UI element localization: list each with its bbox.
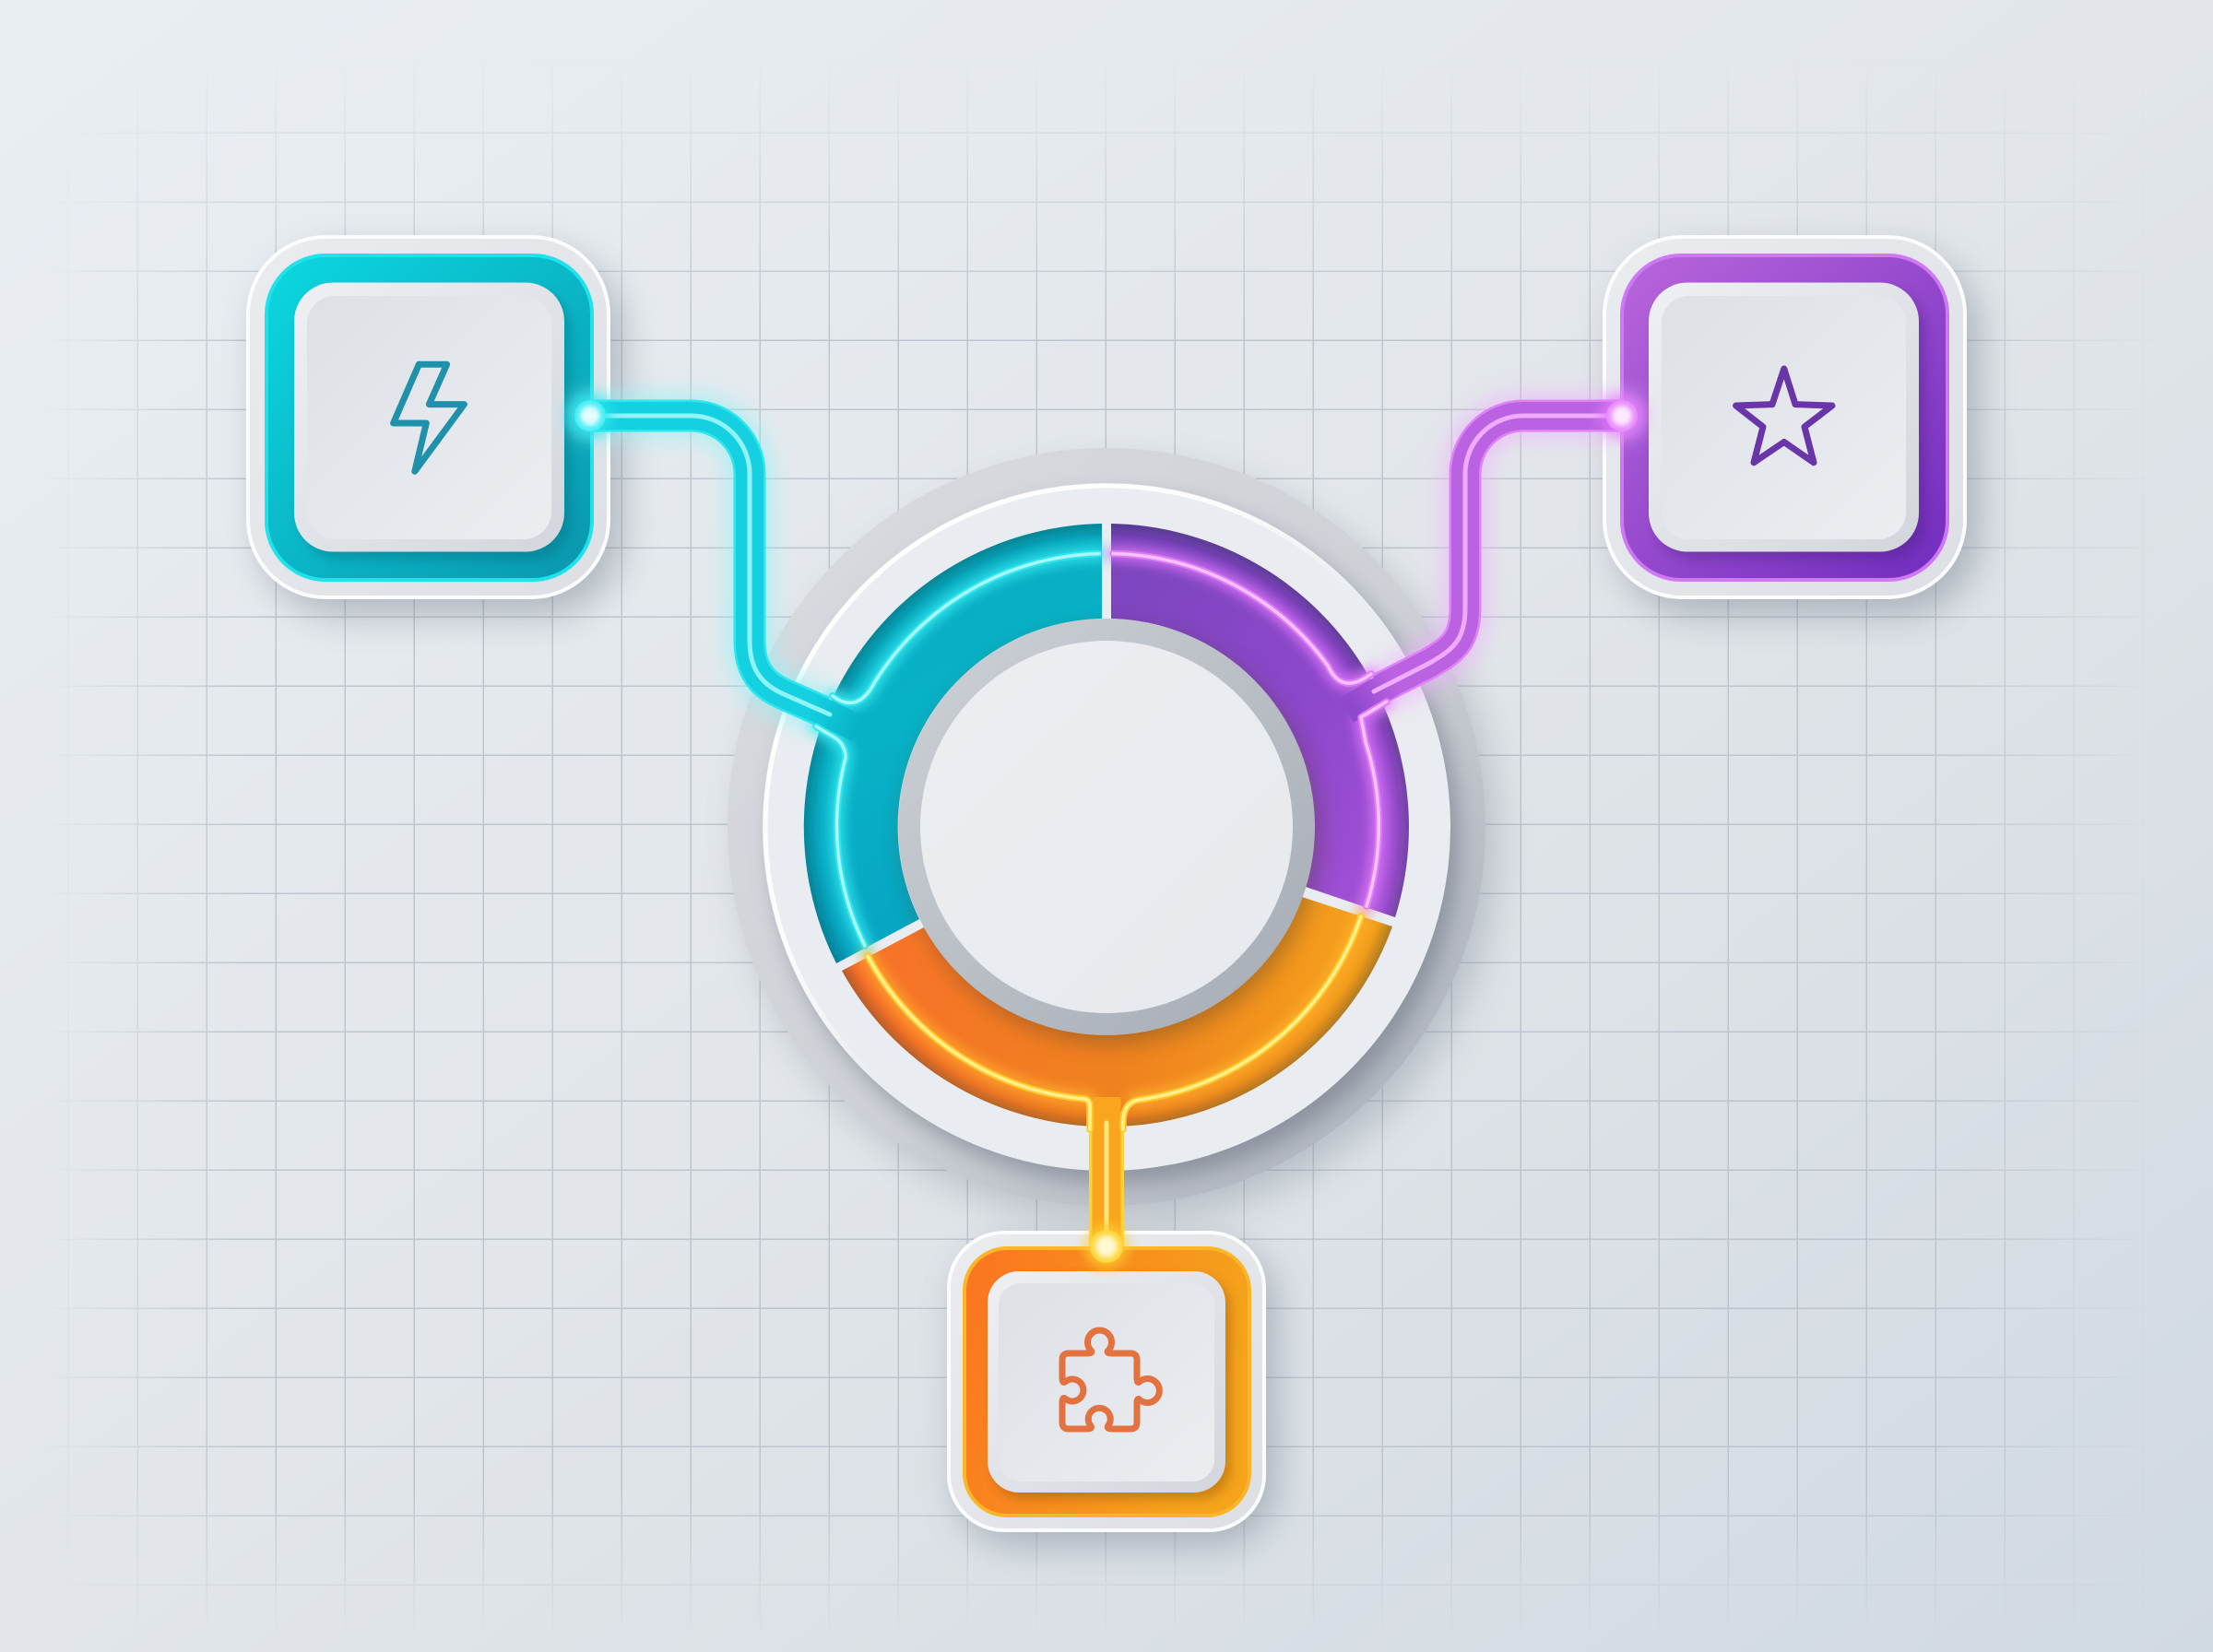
orange frame [964,1248,1249,1516]
connector: teal [568,394,1099,946]
card shell [248,237,609,597]
teal frame [266,255,592,580]
orange trace glow [868,916,1361,1100]
card: star [1604,237,1980,616]
key face [1662,296,1906,539]
purple node [1600,394,1644,438]
inner groove [898,619,1315,1035]
card shell [1604,237,1965,597]
purple ring trace [1113,553,1387,906]
teal glow [590,416,816,709]
purple pipe [1379,416,1622,689]
white ring plate [763,483,1460,1184]
orange node [1084,1224,1129,1268]
key face [307,296,551,539]
teal trace glow [816,553,1099,946]
connector: orange [868,916,1361,1268]
orange ring trace [868,916,1361,1129]
teal ring trace [816,553,1099,946]
orange glow [1083,1143,1130,1246]
teal node [568,394,612,438]
orange pipe [1089,1120,1124,1246]
purple glow [1392,416,1622,684]
card shell [949,1233,1264,1530]
card shadow [957,1245,1276,1546]
connector: purple [1113,394,1644,906]
icon: lightning bolt [394,364,464,471]
centre disc [920,641,1293,1013]
outer disc [728,448,1498,1222]
key face [999,1283,1214,1481]
card shadow [1615,252,1980,616]
ring segment: teal [804,524,1102,963]
card shadow [259,252,623,616]
card: puzzle piece [949,1233,1276,1546]
key base [988,1271,1231,1499]
purple frame [1622,255,1947,580]
key base [1649,282,1925,560]
icon: star [1736,369,1832,463]
central ring diagram [728,448,1498,1222]
teal pipe core [590,416,830,714]
orange pipe core [1105,1123,1108,1240]
teal pipe [590,416,823,712]
ring inner shading [799,520,1414,1134]
icon: puzzle piece [1062,1330,1159,1429]
purple pipe core [1374,416,1622,691]
key base [294,282,571,560]
ring segment: orange [842,897,1392,1127]
ring segment: purple [1111,524,1409,917]
card: lightning bolt [248,237,623,616]
purple trace glow [1113,553,1387,906]
